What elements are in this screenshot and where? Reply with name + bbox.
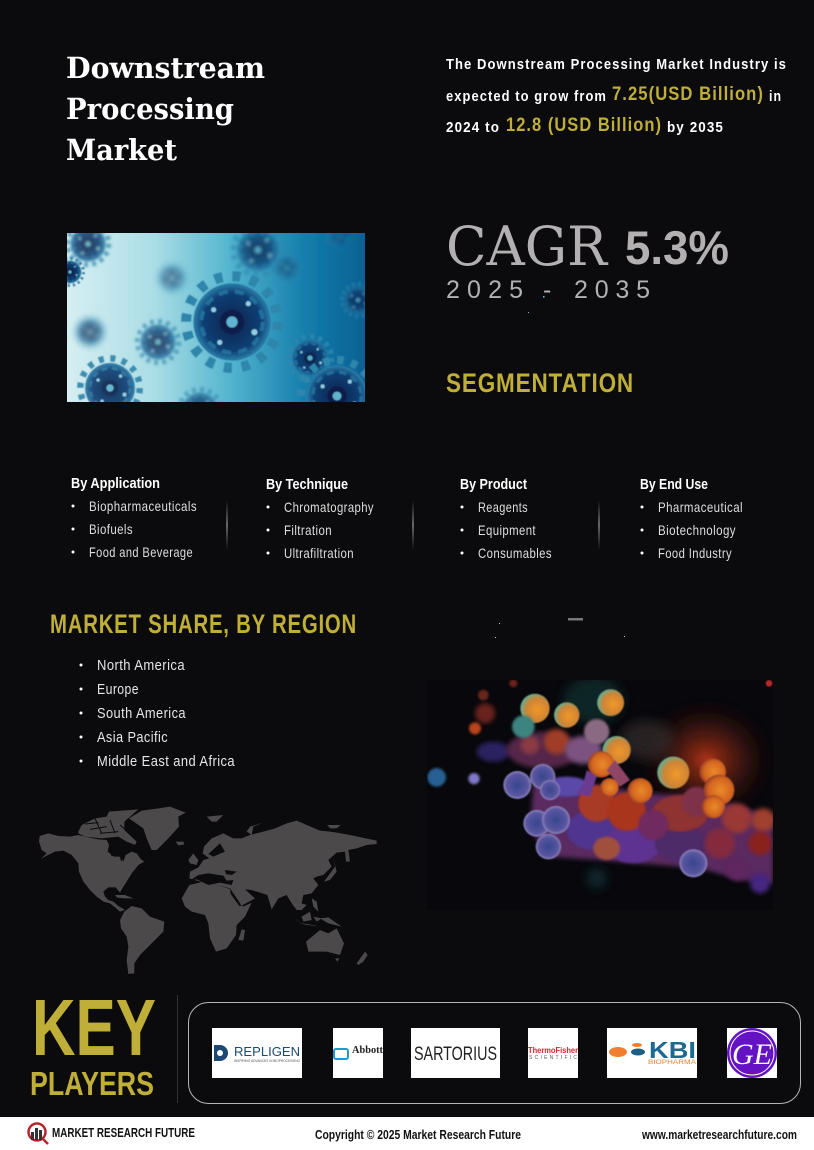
- logo: Repligen: [212, 1028, 302, 1078]
- logo: KBI Biopharma: KBI: [649, 1037, 696, 1063]
- segment: by technique: Filtration: [284, 522, 332, 538]
- segment: by technique: Ultrafiltration: [284, 545, 354, 561]
- segment: by technique: Chromatography: [284, 499, 374, 515]
- segment: by end use: Food Industry: [658, 545, 732, 561]
- logo: KBI Biopharma: [607, 1028, 697, 1078]
- logo: Sartorius: SARTORIUS: [414, 1044, 497, 1065]
- title: Processing: [66, 92, 234, 126]
- logo: GE: GE: [732, 1038, 772, 1071]
- segment: by end use: Biotechnology: [658, 522, 736, 538]
- CAGR period: 2035: [574, 276, 650, 304]
- segment: by application: Biopharmaceuticals: [89, 498, 197, 514]
- segment: by product: [460, 477, 552, 561]
- footer logo: [28, 1124, 195, 1144]
- market size summary text: 2024 to: [446, 120, 500, 136]
- market size summary text: 12.8 (USD Billion): [506, 115, 662, 136]
- CAGR figure: 5.3%: [625, 221, 729, 274]
- market size summary text: [446, 57, 787, 136]
- market size summary text: expected to grow from: [446, 89, 607, 105]
- CAGR figure: CAGR: [446, 215, 608, 278]
- eurasia africa oceania: [182, 815, 377, 965]
- key players heading: KEY: [32, 983, 156, 1072]
- americas and greenland: [39, 807, 186, 974]
- key players heading: [30, 983, 156, 1102]
- key players panel: [188, 1002, 800, 1104]
- footer bar: [0, 1117, 814, 1150]
- logo: Repligen: REPLIGEN: [234, 1044, 300, 1059]
- logo: KBI Biopharma: BIOPHARMA: [648, 1060, 696, 1066]
- segment: by application: Food and Beverage: [89, 544, 193, 560]
- segment: by technique: [266, 477, 374, 561]
- CAGR period: [446, 276, 650, 304]
- segment: by product: Reagents: [478, 499, 528, 515]
- speckles: [495, 296, 625, 638]
- key players heading: PLAYERS: [30, 1065, 154, 1102]
- image: virus particles: [67, 233, 365, 402]
- segment: by end use: [640, 477, 743, 561]
- logo: Abbott: Abbott: [352, 1045, 384, 1056]
- segment: by application: [71, 476, 197, 560]
- segment: by end use: By End Use: [640, 477, 708, 493]
- world map: [39, 807, 377, 974]
- CAGR period: 2025: [446, 276, 523, 304]
- logo: Thermo Fisher: ThermoFisher: [528, 1046, 578, 1055]
- logo: Thermo Fisher: [528, 1028, 578, 1078]
- segment: by end use: Pharmaceutical: [658, 499, 743, 515]
- logo: Sartorius: [411, 1028, 500, 1078]
- region list: [80, 657, 235, 770]
- footer logo: MARKET RESEARCH FUTURE: [52, 1126, 195, 1140]
- market size summary text: 7.25(USD Billion): [612, 84, 764, 105]
- segment: by application: By Application: [71, 476, 160, 492]
- region list: Asia Pacific: [97, 729, 168, 746]
- CAGR figure: [446, 215, 729, 278]
- CAGR period: -: [543, 276, 551, 304]
- title: Downstream: [66, 51, 265, 85]
- region list: Middle East and Africa: [97, 753, 235, 770]
- segment: by application: Biofuels: [89, 521, 133, 537]
- segment: by technique: By Technique: [266, 477, 348, 493]
- copyright: Copyright © 2025 Market Research Future: [315, 1128, 521, 1142]
- logo: Thermo Fisher: SCIENTIFIC: [529, 1055, 577, 1061]
- region list: Europe: [97, 681, 139, 698]
- title: [66, 51, 265, 167]
- title: Market: [66, 133, 178, 167]
- region list: North America: [97, 657, 185, 674]
- segment: by product: By Product: [460, 477, 527, 493]
- image: molecular structure: [427, 677, 777, 910]
- segment: by product: Consumables: [478, 545, 552, 561]
- market size summary text: in: [769, 89, 782, 105]
- segmentation heading: SEGMENTATION: [446, 368, 634, 398]
- segment: by product: Equipment: [478, 522, 536, 538]
- logo: Repligen: INSPIRING ADVANCES IN BIOPROCESSING: [234, 1059, 300, 1063]
- region list: South America: [97, 705, 186, 722]
- market share heading: MARKET SHARE, BY REGION: [50, 609, 357, 639]
- market size summary text: by 2035: [667, 120, 724, 136]
- logo: GE: [727, 1028, 777, 1078]
- logo: Abbott: [333, 1028, 384, 1078]
